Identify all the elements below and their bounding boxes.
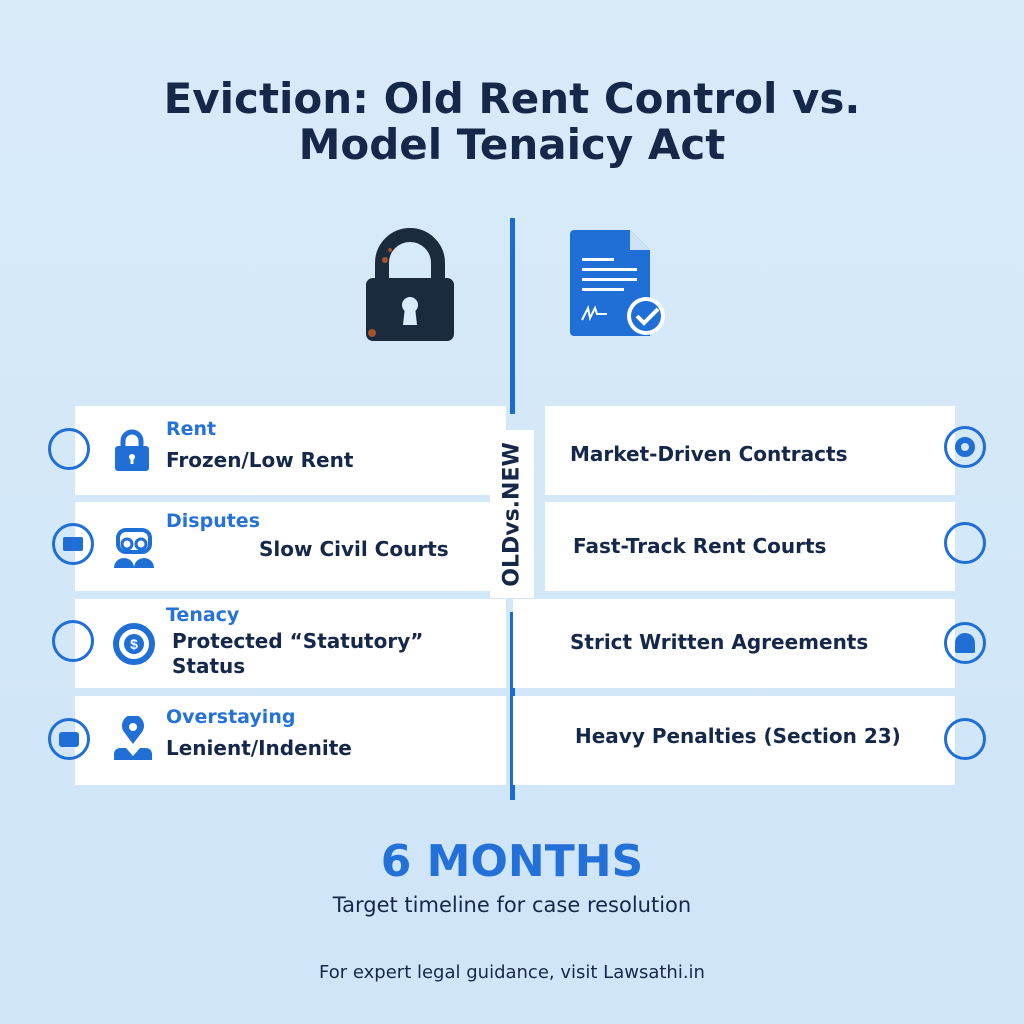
row: market-driven <box>545 406 955 495</box>
icon: rusty padlock <box>366 228 454 341</box>
stat caption: Target timeline for case resolution <box>333 893 691 917</box>
footer: For expert legal guidance, visit Lawsathi.in <box>319 962 705 983</box>
panel: right rows (new) <box>513 406 986 785</box>
row: rent <box>75 406 506 495</box>
market text: Market-Driven Contracts <box>570 442 847 466</box>
title <box>164 74 860 169</box>
row: tenancy <box>75 599 506 688</box>
icon: circle 2 <box>944 522 986 564</box>
title: Eviction: Old Rent Control vs. <box>164 74 860 123</box>
icon: circle 1 <box>48 428 90 470</box>
icon: people <box>114 528 154 568</box>
row: disputes <box>75 502 506 591</box>
heavy text: Heavy Penalties (Section 23) <box>575 724 901 748</box>
vertical label OLD vs NEW <box>490 430 534 598</box>
overstaying text: Lenient/Indenite <box>166 736 352 760</box>
icon: dollar cycle <box>113 623 155 665</box>
title: Model Tenaicy Act <box>299 120 725 169</box>
icon: circle 3 <box>52 620 94 662</box>
icon: location person <box>114 716 152 760</box>
divider line bottom <box>510 612 515 800</box>
icon: document with check <box>570 230 665 336</box>
row: strict <box>513 599 955 688</box>
rent label: Rent <box>166 418 216 440</box>
stat: 6 months: 6 MONTHS <box>381 836 643 887</box>
row: fast-track <box>545 502 955 591</box>
rent text: Frozen/Low Rent <box>166 448 353 472</box>
tenancy text: Status <box>172 654 245 678</box>
icon: helmet circle <box>944 622 986 664</box>
vertical label OLD vs NEW: OLDvs.NEW <box>500 442 525 586</box>
icon: gear circle <box>944 426 986 468</box>
disputes label: Disputes <box>166 510 260 532</box>
icon: circle play <box>48 718 90 760</box>
row: overstaying <box>75 696 506 785</box>
icon: dollar cycle: $ <box>130 636 138 652</box>
tenancy label: Tenacy <box>166 604 239 626</box>
overstaying label: Overstaying <box>166 706 295 728</box>
icon: circle disputes <box>52 523 94 565</box>
divider line top <box>510 218 515 414</box>
icon: small lock <box>115 430 149 471</box>
fast-track text: Fast-Track Rent Courts <box>573 534 826 558</box>
disputes text: Slow Civil Courts <box>259 537 449 561</box>
tenancy text: Protected “Statutory” <box>172 629 423 653</box>
strict text: Strict Written Agreements <box>570 630 868 654</box>
icon: circle 4 <box>944 718 986 760</box>
panel: left rows (old) <box>48 406 506 785</box>
row: heavy <box>513 696 955 785</box>
tenancy text <box>172 629 423 678</box>
